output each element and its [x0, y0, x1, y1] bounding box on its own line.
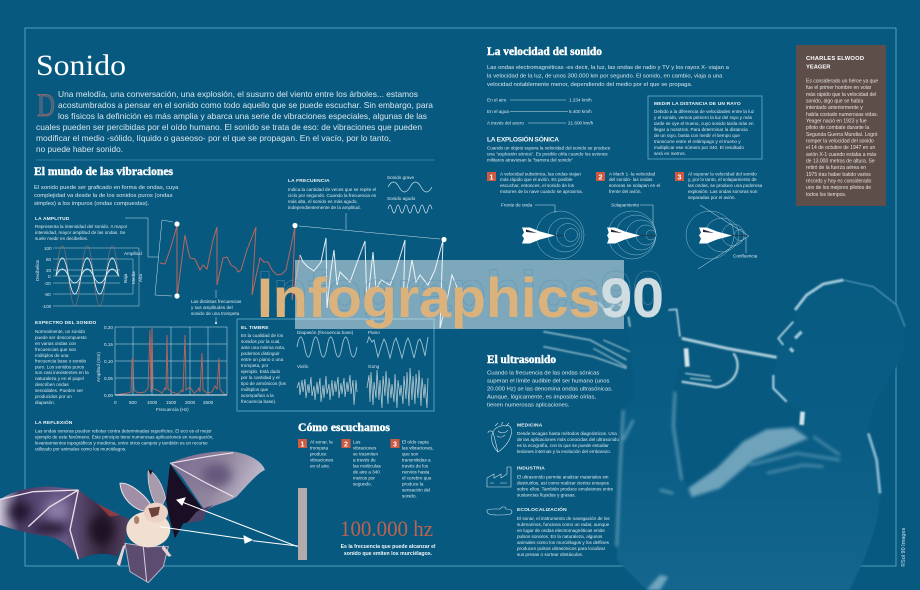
panel: charles elwood yeager: uno de los mejores pilotos de — [806, 185, 871, 191]
speed list: En el aire — [487, 98, 507, 102]
step 2: 2 — [344, 442, 348, 448]
step 3: las vibraciones, — [402, 446, 434, 450]
right wing shading — [202, 463, 232, 487]
chart: sound spectrum: 500 — [129, 400, 137, 405]
panel: medir la distancia de un rayo: llegar a nosotros. Para determinar la distancia — [654, 127, 748, 132]
left wing — [0, 487, 128, 560]
text: industria: destruirlos, así como realizar ciertos ensayos — [517, 480, 610, 486]
text: la explosion sonica — [487, 146, 611, 162]
step 3: 3 — [393, 442, 397, 448]
step 3: El oído capta — [402, 440, 429, 444]
icon: factory — [487, 467, 511, 487]
waveform: diapason — [297, 330, 357, 357]
legend: sonido grave / agudo: Sonido agudo — [387, 196, 416, 201]
feet — [117, 543, 172, 566]
chart: sound spectrum: 0,15 — [104, 342, 113, 347]
intro: ultrasonido — [487, 370, 613, 408]
intro: ultrasonido: 20.000 Hz) se las denomina ondas ultrasónicas. — [487, 386, 613, 392]
body — [126, 511, 170, 547]
chart: amplitude sine waves: 20 — [46, 268, 52, 273]
text: el timbre: por la cantidad y el — [241, 375, 280, 380]
text: espectro del sonido: diapasón. — [35, 400, 55, 405]
chart: amplitude sine waves: Baja — [123, 273, 128, 283]
step 3: produce la — [402, 482, 424, 486]
intro: waves: El sonido puede ser graficado en forma de ondas, cuya — [34, 185, 179, 191]
panel: charles elwood yeager: 1975 tras haber batido varios — [806, 172, 871, 178]
icon: heart — [488, 422, 512, 452]
sonic step 3: y, por lo tanto, el solapamiento de — [688, 177, 757, 182]
sonic step 1: motores de la nave cuando se aproxima. — [500, 189, 583, 194]
text: ecolocalizacion: El sonar, el instrumento de navegación de los — [517, 516, 610, 521]
intro: waves — [34, 185, 179, 207]
composite waveform: next period (white) — [300, 238, 458, 328]
diagram: supersonic plane: Confluencia — [733, 254, 758, 258]
text: espectro del sonido: Normalmente, un sonido — [35, 329, 85, 334]
step 2: a través de — [353, 458, 376, 462]
chart: amplitude sine waves: Decibelios — [35, 259, 40, 281]
right wing — [170, 451, 265, 510]
text: medicina: de las aplicaciones más conocidas del ultrasonido — [517, 437, 619, 442]
step 2: segundo. — [353, 482, 372, 486]
amplitude marker — [125, 218, 180, 299]
chart: amplitude sine waves: Alta — [138, 274, 143, 282]
chart: amplitude sine waves: 0 — [48, 274, 51, 279]
text: el timbre: acompañan a la — [241, 393, 274, 398]
note: frequencies of a trumpet: Las distintas frecuencias — [191, 299, 242, 304]
intro: ultrasonido: Aunque, lógicamente, es imposible oírlas, — [487, 394, 596, 400]
text: industria: El ultrasonido permite analizar materiales sin — [517, 474, 609, 480]
panel: charles elwood yeager: todos los tiempos. — [806, 192, 846, 198]
text: espectro del sonido: son casi inexistentes en la — [35, 370, 89, 375]
sonic step 3: Al superar la velocidad del sonido — [688, 172, 757, 176]
text: el timbre: ejemplo. Está dado — [241, 369, 281, 374]
waveform: piano — [367, 330, 428, 358]
panel: charles elwood yeager — [796, 45, 886, 206]
text: el timbre: ante una misma nota, — [241, 345, 285, 350]
musician silhouette — [617, 279, 905, 590]
chart: amplitude sine waves: Media — [131, 271, 136, 284]
panel: medir la distancia de un rayo: multiplicar ese número por 340. El resultado — [654, 145, 744, 150]
sonic step 2 — [596, 172, 660, 194]
text: el timbre: múltiplos que — [241, 387, 269, 392]
sonic step 2: sonoras se solapan en el — [609, 183, 660, 188]
note: frequencies of a trumpet: sonido de una trompeta — [191, 311, 240, 316]
text: la explosion sonica: militares atraviesan la "barrera del sonido" — [487, 158, 573, 162]
speed list: 5.400 km/h — [569, 109, 592, 114]
speed list: A través del acero — [487, 120, 524, 126]
text: industria — [517, 466, 614, 498]
panel: medir la distancia de un rayo: MEDIR LA DISTANCIA DE UN RAYO — [654, 101, 741, 107]
diagram: mach 1 plane — [607, 202, 656, 259]
text: espectro del sonido: en varias ondas con — [35, 341, 77, 346]
chart: amplitude sine waves: -20 — [44, 281, 51, 286]
caption: 100.000 hz — [341, 544, 436, 557]
text: espectro del sonido: puro. Los sonidos puros — [35, 364, 85, 370]
text: industria: sobre ellos. También produce emulsiones entre — [517, 486, 614, 492]
panel: charles elwood yeager: Segunda Guerra Mundial. Logró — [806, 132, 878, 138]
step 3: el cerebro que — [402, 476, 432, 480]
bat — [0, 451, 265, 583]
text: la frecuencia: independientemente de la amplitud. — [288, 205, 361, 210]
musician with trumpet — [543, 279, 905, 590]
text: el timbre — [241, 325, 287, 404]
text: la amplitud: suele medir en decibelios. — [35, 236, 88, 241]
step 3: nervios hasta — [402, 470, 430, 474]
lead paragraph: los físicos la definición es más amplia y abarca una serie de vibraciones especiales, algunas de las — [58, 111, 427, 121]
sonic step 1: más rápido que el avión. Es posible — [500, 177, 573, 182]
icon: submarine — [487, 507, 512, 515]
lead paragraph — [36, 89, 433, 154]
text: el timbre: trompeta, por — [241, 363, 269, 368]
sonic step 2: A Mach 1 -la velocidad — [609, 172, 656, 176]
step 1: trompeta — [310, 446, 329, 450]
text: espectro del sonido: ESPECTRO DEL SONIDO — [35, 320, 97, 326]
text: medicina: lesiones internas y la evolución del embarazo. — [517, 449, 611, 454]
text: ecolocalizacion: sus presas o sortear obstáculos. — [517, 552, 583, 557]
heading: El mundo de las vibraciones: El mundo de las vibraciones — [34, 166, 174, 178]
step 2: de aire a 340 — [353, 470, 380, 474]
arrow: emitted sound — [160, 527, 252, 543]
text: la frecuencia: LA FRECUENCIA — [288, 178, 330, 184]
text: espectro del sonido: puede ser descompuesto — [35, 335, 87, 340]
panel: charles elwood yeager: sonido, algo que se había — [806, 98, 863, 104]
reflecting wall — [298, 488, 307, 560]
step 3: través de los — [402, 464, 429, 468]
text: espectro del sonido: producidos por un — [35, 394, 72, 399]
chart: sound spectrum: 2500 — [203, 400, 214, 405]
step 1: produce — [310, 452, 327, 456]
text: ecolocalizacion: animales como los murciélagos y los delfines — [517, 540, 610, 545]
echo arrows — [160, 498, 298, 547]
chart: amplitude sine waves — [35, 246, 143, 309]
text: medicina: Desde tecagas hasta métodos diagnósticos. Una — [517, 431, 617, 436]
text: el timbre: podemos distinguir — [241, 351, 280, 356]
text: ecolocalizacion: pulsos sonoros. En la naturaleza, algunos — [517, 534, 603, 539]
trumpet — [543, 303, 777, 387]
chart: sound spectrum: Frecuencia (Hz) — [156, 407, 189, 412]
chart: amplitude sine waves: 100 — [44, 246, 52, 251]
heading: la velocidad del sonido: La velocidad del sonido — [487, 46, 602, 58]
watermark: Infographics90 — [257, 259, 664, 322]
step 1: 1 — [300, 442, 304, 448]
sonic step 2: del sonido- las ondas — [609, 177, 653, 182]
chart: amplitude sine waves: 60 — [46, 257, 52, 262]
step 3: que son — [402, 452, 419, 456]
right wing dark — [166, 464, 203, 538]
text: la amplitud: intensidad, mayor amplitud de las ondas. Se — [35, 230, 126, 235]
waveform: violin — [297, 364, 357, 405]
panel: medir la distancia de un rayo: y el sonido, vemos primero la luz del rayo y más — [654, 115, 753, 120]
shirt highlights — [617, 392, 840, 590]
text: el timbre: EL TIMBRE — [241, 325, 269, 331]
step 3: sensación del — [402, 488, 430, 492]
sonic step 2: 2 — [598, 174, 602, 182]
text: la explosion sonica: una "explosión sónica". Es posible oírla cuando los aviones — [487, 152, 608, 156]
text: la reflexion: Las ondas sonoras pueden rebotar contra determinadas superficies. El eco es el mejor — [35, 428, 212, 434]
intro: velocidad — [487, 65, 730, 88]
lead paragraph: modificar el medio -sólido, líquido o gaseoso- por el que se propagan. En el vacío, por lo tanto, — [36, 133, 391, 143]
composite waveform: trumpet (red) — [160, 226, 300, 300]
text: ecolocalizacion: en lugar de ondas electromagnéticas emite — [517, 528, 605, 533]
caption: 100.000 hz: sonido que emiten los murciélagos. — [344, 551, 433, 557]
watermark: Infographics90 — [257, 266, 664, 329]
lead paragraph: no puede haber sonido. — [36, 144, 123, 154]
chart: sound spectrum: 1500 — [166, 400, 177, 405]
text: la reflexion — [35, 418, 214, 452]
text: la frecuencia: Indica la cantidad de veces que se repite el — [288, 187, 376, 192]
chart: sound spectrum: 0,20 — [104, 325, 113, 330]
intro: ultrasonido: Cuando la frecuencia de las ondas sónicas — [487, 370, 599, 376]
text: la explosion sonica: Cuando un objeto supera la velocidad del sonido se produce — [487, 146, 611, 150]
panel: charles elwood yeager: el 14 de octubre de 1947 en un — [806, 145, 875, 151]
panel: charles elwood yeager: Yeager nació en 1923 y fue — [806, 118, 867, 124]
step 2: Las — [353, 440, 361, 444]
note: frequencies of a trumpet — [191, 290, 242, 324]
legend: sonido grave / agudo — [387, 175, 432, 213]
intro: velocidad: velocidad notablemente menor, dependiendo del medio por el que se propaga. — [487, 82, 693, 88]
lead paragraph: Una melodía, una conversación, una explosión, el susurro del viento entre los árboles... estamos — [58, 89, 418, 99]
step 3 — [390, 439, 434, 498]
panel: charles elwood yeager: retiró de la fuerza aérea en — [806, 165, 866, 171]
heading: la explosion sonica: LA EXPLOSIÓN SÓNICA — [487, 134, 559, 144]
step 1 — [298, 439, 334, 468]
chart: amplitude sine waves: Amplitud — [124, 251, 142, 256]
sonic step 1: escuchar, entonces, el sonido de los — [500, 183, 575, 188]
head highlights — [773, 280, 905, 493]
panel: charles elwood yeager: récords y hoy es considerado — [806, 178, 872, 184]
waveform: violin: Violín — [297, 364, 309, 369]
text: espectro del sonido: frecuencias que son — [35, 347, 77, 352]
text: espectro del sonido — [35, 320, 97, 405]
step 2: las moléculas — [353, 464, 382, 468]
waveform: diapason: Diapasón (frecuencia base) — [297, 330, 354, 335]
text: la frecuencia: más alta, el sonido es más agudo, — [288, 199, 358, 204]
chart: sound spectrum: 0,05 — [104, 376, 113, 381]
text: la reflexion: levantamientos topográficos y medicina, entre otros campos y también es un recurso — [35, 440, 208, 446]
panel: charles elwood yeager: Es considerado un héroe ya que — [806, 78, 878, 84]
text: la reflexion: LA REFLEXIÓN — [35, 418, 73, 426]
chart: sound spectrum: Amplitud (mm) — [96, 352, 101, 382]
chart: sound spectrum: 0,00 — [104, 393, 113, 398]
chart: sound spectrum: 1000 — [147, 400, 158, 405]
waveform: piano: Piano — [368, 330, 380, 335]
sonic step 1: 1 — [490, 174, 494, 182]
note: frequencies of a trumpet: y sus amplitudes del — [191, 305, 233, 310]
panel: medir la distancia de un rayo: tarde se oye el trueno, cuyo sonido tarda más en — [654, 121, 754, 126]
step 3: transmitidas a — [402, 458, 431, 462]
text: medicina: es la ecografía, con la que se puede estudiar — [517, 443, 609, 448]
panel: charles elwood yeager: piloto de combate durante la — [806, 125, 869, 131]
text: espectro del sonido: naturaleza y en el papel — [35, 376, 84, 381]
panel: charles elwood yeager: avión X-1 cuando estaba a más — [806, 152, 877, 158]
waveform: gong: Gong — [368, 364, 380, 369]
sonic step 3: separadas por el avión. — [688, 195, 736, 200]
text: el timbre: entre un piano o una — [241, 357, 284, 362]
text: espectro del sonido: describen ondas — [35, 382, 69, 387]
steps: como escuchamos — [298, 439, 434, 498]
panel: charles elwood yeager: había costado numerosas vidas. — [806, 112, 878, 118]
speed list: 21.600 km/h — [568, 120, 594, 126]
drop cap: D — [37, 88, 55, 124]
sonic step 1 — [487, 172, 583, 194]
text: ecolocalizacion — [517, 505, 610, 557]
panel: charles elwood yeager: fue el primer hombre en volar — [806, 85, 872, 91]
intro: waves: complejidad va desde la de los sonidos puros (ondas — [34, 193, 173, 199]
tail membrane — [125, 543, 168, 583]
intro: ultrasonido: tienen numerosas aplicaciones. — [487, 402, 570, 408]
step 2: metros por — [353, 476, 375, 480]
panel: medir la distancia de un rayo — [648, 96, 762, 159]
title: Sonido — [36, 49, 126, 82]
ears — [120, 483, 150, 512]
speed list — [487, 98, 594, 126]
speed list: En el agua — [487, 109, 509, 114]
heading: el ultrasonido: El ultrasonido — [487, 354, 556, 366]
intro: velocidad: Las ondas electromagnéticas -es decir, la luz, las ondas de radio y TV y los rayos X- viajan a — [487, 65, 730, 71]
diagram: subsonic plane: Frente de onda — [501, 202, 533, 208]
waveform: gong — [367, 364, 428, 408]
panel: charles elwood yeager: romper la velocidad del sonido — [806, 138, 874, 144]
text: la amplitud: Representa la intensidad del sonido. A mayor — [35, 224, 128, 229]
panel: charles elwood yeager: YEAGER — [806, 64, 831, 70]
lead paragraph: cuales pueden ser percibidas por el oído humano. El sonido se trata de eso: de vibraciones que pueden — [36, 122, 422, 132]
step 1: Al sonar, la — [310, 440, 333, 444]
diagram: subsonic plane — [501, 202, 584, 259]
chart: amplitude sine waves: -60 — [44, 292, 51, 297]
panel: el timbre — [237, 319, 434, 411]
panel: charles elwood yeager: de 13.000 metros de altura. Se — [806, 158, 875, 164]
sonic step 1: A velocidad subsónica, las ondas viajan — [500, 172, 581, 176]
text: la amplitud — [35, 216, 128, 241]
text: industria: INDUSTRIA — [517, 466, 545, 472]
text: espectro del sonido: múltiplos de una — [35, 353, 69, 358]
intro: waves: simples) a los impuros (ondas compuestas). — [34, 201, 150, 207]
legend: sonido grave / agudo: Sonido grave — [387, 175, 415, 180]
text: industria: sustancias líquidas y grasas. — [517, 492, 576, 498]
sonic step 3: explosión. Las ondas sonoras son — [688, 189, 758, 194]
left wing shading — [9, 500, 114, 545]
intro: ultrasonido: superan el límite audible del ser humano (unos — [487, 378, 610, 384]
text: ecolocalizacion: submarinos, funciona como un radar, aunque — [517, 522, 610, 527]
text: ecolocalizacion: ECOLOCALIZACIÓN — [517, 505, 567, 513]
panel: charles elwood yeager: más rápido que la velocidad del — [806, 92, 876, 98]
text: espectro del sonido: senoidales. Pueden ser — [35, 388, 83, 393]
sonic step 3: 3 — [678, 174, 682, 182]
text: la amplitud: LA AMPLITUD — [35, 216, 70, 222]
chart: sound spectrum: 0 — [114, 400, 117, 405]
step 1: en el aire. — [310, 464, 330, 468]
sonic step 3: las ondas, se produce una poderosa — [688, 183, 763, 188]
panel: medir la distancia de un rayo: será en metros. — [654, 151, 686, 156]
text: ecolocalizacion: producen pulsos ultrasónicos para localizar — [517, 546, 606, 551]
panel: medir la distancia de un rayo: transcurre entre el relámpago y el trueno y — [654, 139, 741, 144]
panel: charles elwood yeager: intentado anteriormente y — [806, 105, 863, 111]
text: la frecuencia: ciclo por segundo. Cuando la frecuencia es — [288, 193, 377, 198]
chart: sound spectrum: 2000 — [185, 400, 196, 405]
sonic step 3 — [675, 172, 763, 200]
text: la reflexion: utilizado por animales como los murciélagos. — [35, 446, 126, 452]
diagram: supersonic plane — [686, 205, 758, 269]
text: medicina: MEDICINA — [517, 422, 543, 428]
step 2: se trasmiten — [353, 452, 378, 456]
text: espectro del sonido: frecuencia base o sonido — [35, 358, 87, 364]
intro: velocidad: la velocidad de la luz, de unos 300.000 km por segundo. El sonido, en cambio, viaja a una — [487, 74, 723, 80]
panel: charles elwood yeager: CHARLES ELWOOD — [806, 56, 864, 62]
panel: medir la distancia de un rayo: Debido a la diferencia de velocidades entre la luz — [654, 109, 755, 114]
caption: 100.000 hz: Es la frecuencia que puede alcanzar el — [341, 544, 436, 550]
speed list: 1.234 km/h — [569, 98, 592, 102]
frequency marker — [292, 213, 447, 242]
text: la frecuencia — [288, 178, 377, 210]
step 1: vibraciones — [310, 458, 334, 462]
text: la reflexion: ejemplo de este fenómeno. Este principio tiene numerosas aplicaciones en navegación, — [35, 434, 214, 440]
panel: medir la distancia de un rayo: de un rayo, basta con medir el tiempo que — [654, 133, 740, 138]
heading: como escuchamos: Cómo escuchamos — [298, 422, 391, 434]
arrow: reflected sound — [177, 498, 298, 547]
big number: 100.000 hz: 100.000 hz — [340, 516, 433, 541]
credit: ©Sol 90 Images — [900, 528, 907, 567]
sonic step 2: frente del avión. — [609, 189, 642, 194]
chart: sound spectrum — [96, 325, 227, 412]
step 2: vibraciones — [353, 446, 377, 450]
step 3: sonido. — [402, 494, 417, 498]
text: medicina — [517, 422, 619, 454]
text: el timbre: Es la cualidad de los — [241, 333, 284, 338]
chart: sound spectrum: 0,10 — [104, 359, 113, 364]
text: el timbre: tipo de armónicos (los — [241, 381, 287, 386]
diagram: mach 1 plane: Solapamiento — [611, 202, 640, 208]
step 2 — [342, 439, 382, 486]
chart: amplitude sine waves: -100 — [42, 304, 52, 309]
text: el timbre: frecuencia base). — [241, 399, 276, 404]
lead paragraph: acostumbrados a pensar en el sonido como todo aquello que se puede escuchar. Sin embargo, para — [58, 100, 433, 110]
text: el timbre: sonidos por la cual, — [241, 339, 281, 344]
